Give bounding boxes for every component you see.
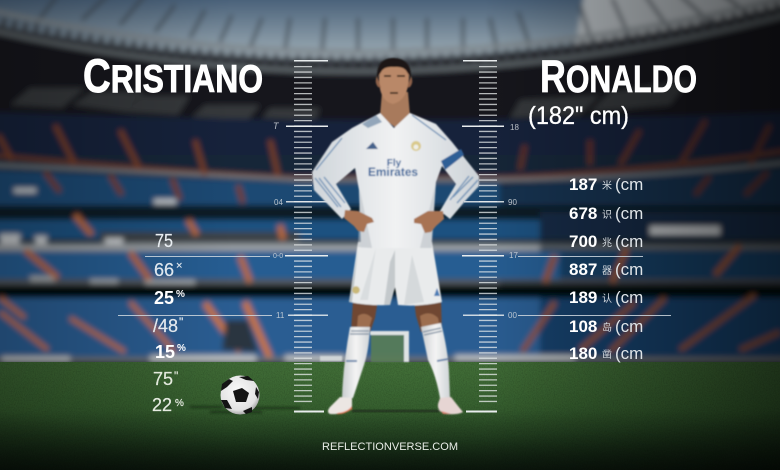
sky	[0, 0, 780, 80]
head	[379, 64, 409, 104]
stat list: right centimetres: 认	[602, 292, 612, 305]
stat list: right centimetres: (cm	[615, 260, 643, 279]
stat list: left percentages: %	[175, 398, 184, 409]
right hand	[414, 211, 444, 233]
captain armband	[441, 149, 464, 170]
orange aisle stairs	[0, 125, 278, 203]
sleeve stripes	[315, 115, 478, 207]
stat list: left percentages	[152, 231, 186, 415]
right boot	[438, 397, 463, 414]
stat list: right centimetres: 米	[602, 179, 612, 192]
stat list: left percentages: /48	[153, 316, 178, 336]
mid tier white rail	[0, 162, 780, 180]
player: Cristiano Ronaldo: Emirates	[368, 167, 418, 179]
title: Cristiano: CRISTIANO	[83, 49, 263, 102]
side vignette	[0, 0, 780, 362]
ruler tick labels	[273, 121, 519, 320]
crest	[411, 141, 421, 151]
ruler tick labels: 04	[274, 198, 283, 207]
stat list: right centimetres	[569, 175, 643, 363]
stat list: left percentages: %	[176, 289, 185, 300]
dark upper stand	[0, 4, 780, 150]
jersey body and sleeves	[312, 113, 479, 248]
stat list: left percentages: 75	[153, 369, 173, 389]
ruler tick labels: 18	[510, 123, 519, 132]
roof panels right	[575, 0, 780, 46]
stat list: left percentages: %	[177, 343, 186, 354]
dark gap	[0, 205, 780, 220]
stat list: left percentages: 75	[155, 231, 173, 251]
right sock	[421, 323, 450, 398]
watermark: site name: REFLECTIONVERSE.COM	[322, 441, 458, 453]
ruler tick labels: 0-0	[273, 253, 283, 260]
stat list: right centimetres: (cm	[615, 232, 643, 251]
bright blue band	[0, 251, 780, 283]
stat list: right centimetres: 兆	[602, 237, 612, 249]
stat list: right centimetres: 187	[569, 175, 597, 194]
roof ring truss	[0, 0, 780, 52]
stat list: right centimetres: 700	[569, 232, 597, 251]
sponsor text: Fly	[387, 158, 402, 169]
white boards row	[0, 243, 540, 251]
stat list: left percentages: 22	[152, 395, 172, 415]
ruler tick labels: T	[273, 121, 280, 131]
pitch shadow	[352, 410, 440, 412]
mid tier blue seats	[0, 170, 300, 207]
title: Ronaldo: RONALDO	[540, 51, 697, 102]
right leg skin	[414, 300, 442, 332]
stat list: left percentages: "	[174, 369, 178, 383]
jersey shadow folds	[358, 182, 436, 248]
stat list: right centimetres: 189	[569, 288, 597, 307]
stat list: left percentages: ×	[176, 260, 182, 272]
stat list: left percentages: 25	[154, 288, 174, 308]
orange band	[0, 150, 780, 178]
stat list: right centimetres: (cm	[615, 288, 643, 307]
soccer ball	[190, 376, 300, 414]
stat list: right centimetres: 岛	[602, 321, 612, 334]
roof struts	[35, 0, 750, 52]
ruler: right height scale	[462, 60, 504, 412]
left hand	[344, 210, 374, 232]
stat list: right centimetres: 108	[569, 317, 597, 336]
horizontal guide lines	[118, 256, 671, 316]
upper seating tier	[0, 112, 780, 205]
stat list: right centimetres: 器	[602, 265, 612, 277]
shorts	[349, 242, 442, 306]
concourse strip	[0, 279, 780, 285]
ruler tick labels: 90	[508, 198, 517, 207]
stat list: right centimetres: (cm	[615, 344, 643, 363]
lower tier seats	[0, 298, 780, 363]
ruler tick labels: 17	[509, 251, 518, 260]
ruler: left height scale	[285, 60, 336, 412]
tunnel dark	[222, 320, 258, 352]
lower upper blue	[0, 220, 780, 240]
left boot	[328, 397, 352, 414]
stat list: right centimetres: 识	[602, 209, 612, 221]
stat list: left percentages: 15	[155, 342, 175, 362]
ruler tick labels: 11	[276, 311, 285, 320]
stat list: right centimetres: 180	[569, 344, 597, 363]
stat list: right centimetres: (cm	[615, 204, 643, 223]
pitchside boards	[0, 357, 780, 363]
adidas logo	[366, 142, 378, 149]
subtitle: height: (182" cm)	[528, 102, 629, 130]
ruler tick labels: 00	[508, 311, 517, 320]
player: Cristiano Ronaldo	[312, 58, 479, 414]
grass pitch	[0, 362, 780, 470]
stat list: right centimetres: 678	[569, 204, 597, 223]
stat list: right centimetres: 887	[569, 260, 597, 279]
stat list: right centimetres: (cm	[615, 175, 643, 194]
stat list: right centimetres: 凿	[602, 348, 612, 361]
neck	[380, 92, 410, 128]
left leg skin	[351, 300, 378, 332]
stat list: right centimetres: (cm	[615, 317, 643, 336]
hair	[377, 58, 411, 78]
goal frame	[320, 331, 409, 362]
seats and crowd row	[100, 232, 300, 242]
upper concourse panels	[10, 80, 690, 120]
left sock	[342, 327, 370, 398]
stat list: left percentages: "	[179, 315, 183, 329]
stat list: left percentages: 66	[154, 260, 174, 280]
